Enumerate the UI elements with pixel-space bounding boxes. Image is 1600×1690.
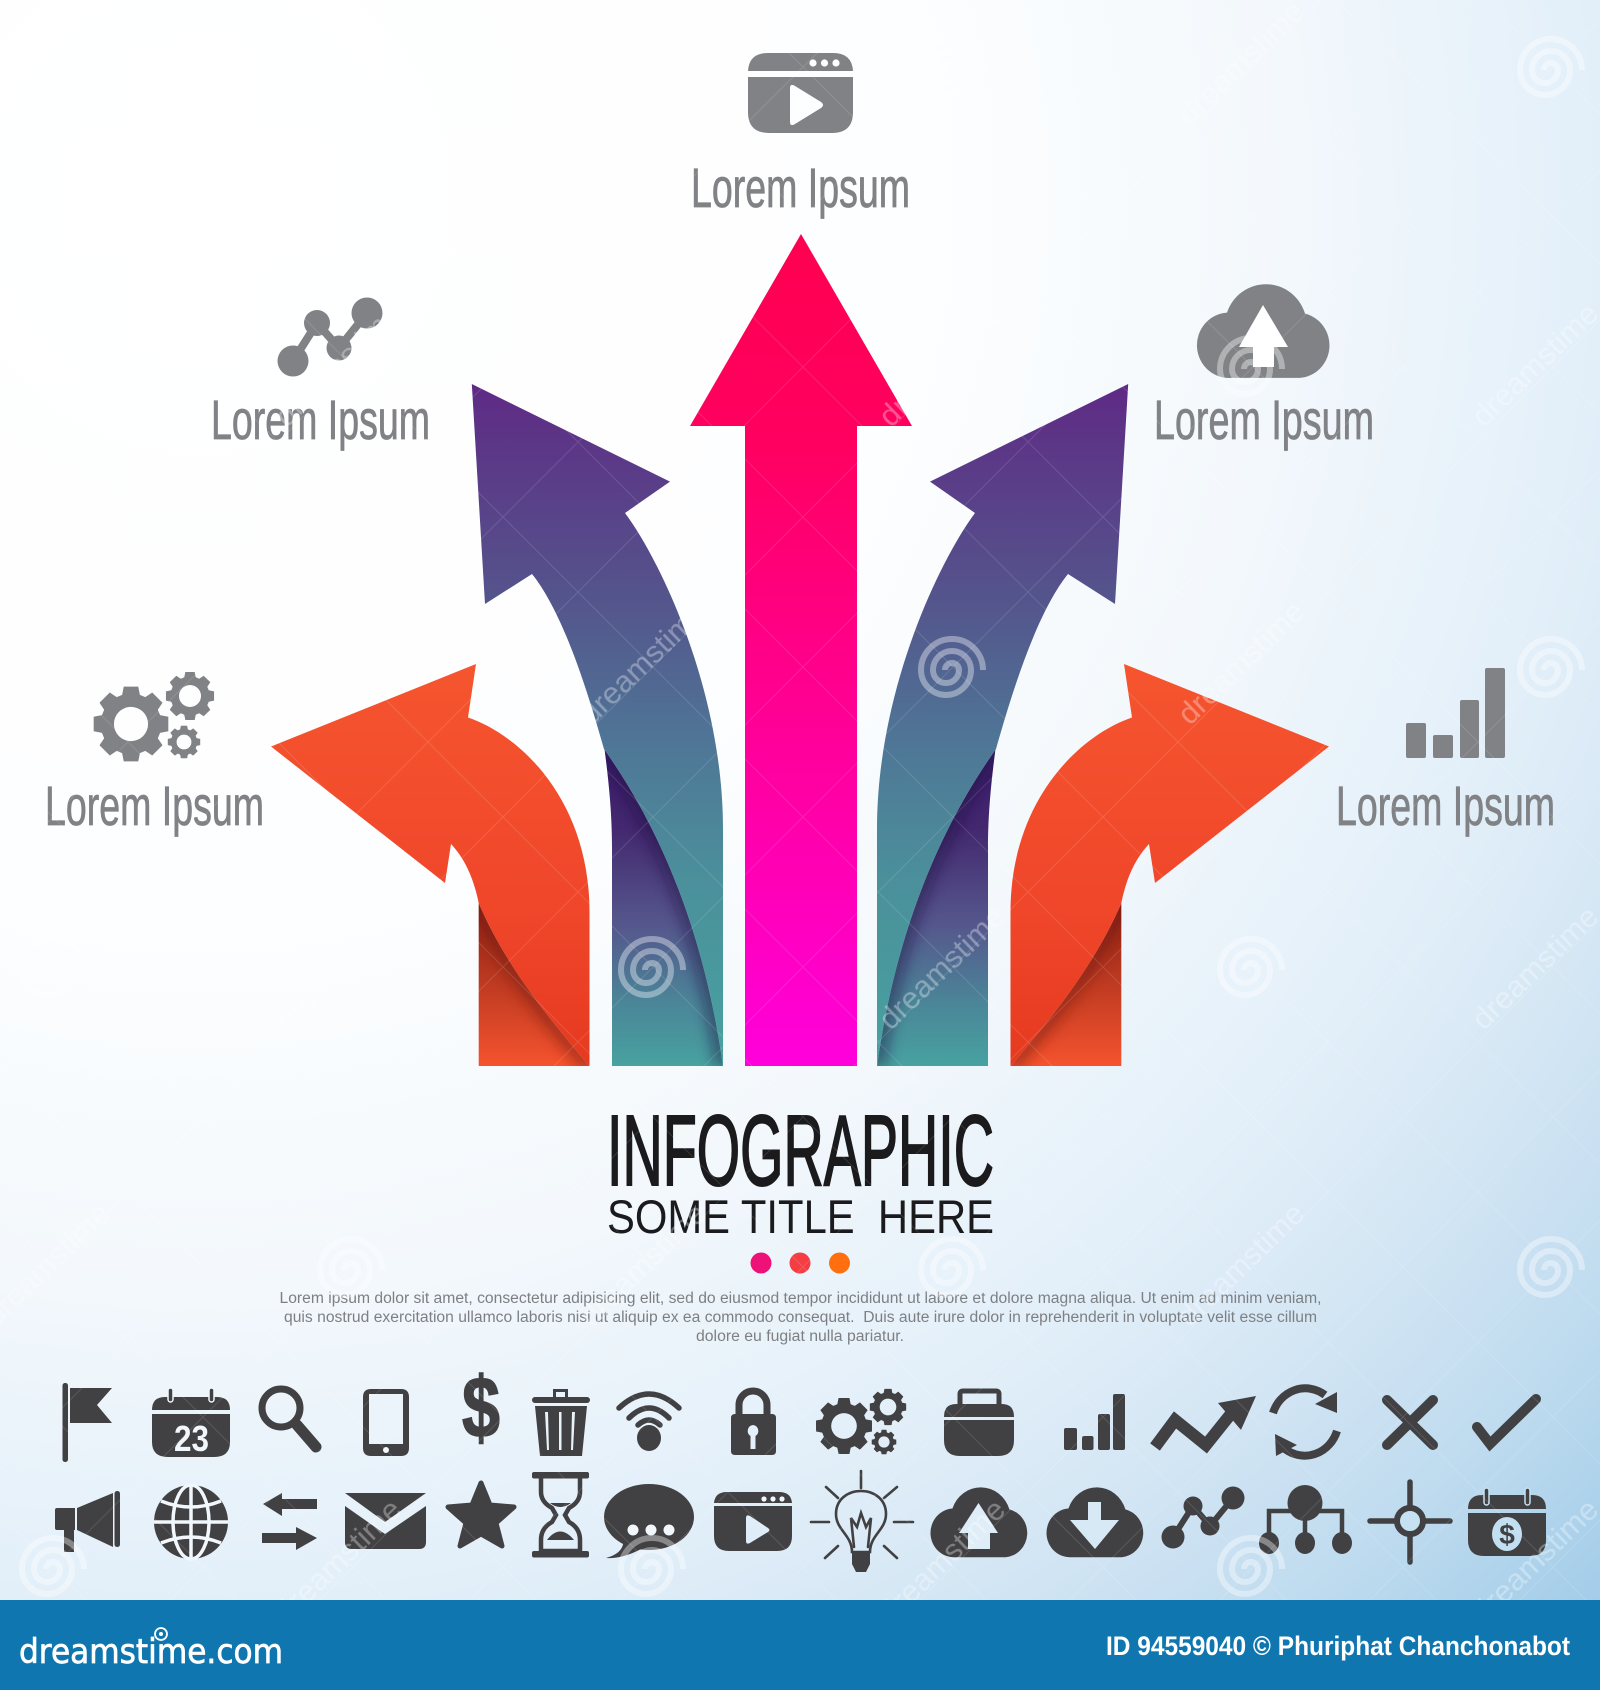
icon: briefcase [944, 1391, 1014, 1456]
paragraph: dolore eu fugiat nulla pariatur. [696, 1328, 904, 1345]
icon row 2 [55, 1471, 1546, 1572]
subtitle: SOME TITLE HERE [607, 1190, 994, 1243]
icon: calendar 23: 23 [174, 1418, 209, 1459]
icon: hourglass [532, 1472, 589, 1558]
icon: hierarchy [1259, 1485, 1352, 1554]
icon: calendar dollar: $ [1499, 1519, 1515, 1550]
icon: speech bubble [604, 1484, 694, 1558]
brand logo: dreamstime.com [19, 1632, 283, 1672]
icon: bars small [1064, 1394, 1125, 1450]
label: top: Lorem Ipsum [691, 156, 910, 219]
icon: globe [154, 1485, 228, 1559]
icon: video player small [714, 1492, 792, 1551]
icon: lock [731, 1391, 776, 1455]
arrow: right purple [877, 384, 1128, 1066]
icon: envelope [345, 1493, 426, 1549]
icon: gears small [816, 1389, 906, 1454]
icon: light bulb [811, 1471, 913, 1572]
icon: cross [1387, 1400, 1433, 1445]
paragraph [280, 1290, 1322, 1345]
icon row 1 [62, 1360, 1536, 1462]
title: INFOGRAPHIC [607, 1095, 994, 1207]
icon: calendar dollar [1468, 1488, 1546, 1556]
icon: magnifier [262, 1389, 316, 1447]
watermark: text: dreamstime [871, 1492, 1012, 1629]
icon: dollar: $ [462, 1360, 500, 1456]
watermark: text: dreamstime [267, 899, 408, 1036]
icon: gears (left) [94, 672, 214, 761]
icon: network trend (upper left) [278, 298, 382, 376]
icon: video player (top) [748, 53, 853, 133]
icon: cloud download small [1046, 1487, 1143, 1557]
icon: cloud upload (upper right) [1197, 284, 1329, 378]
arrow group [271, 234, 1329, 1066]
watermark: text: dreamstime [1170, 1196, 1311, 1333]
arrow: left purple [472, 384, 723, 1066]
watermark: text: dreamstime [871, 899, 1012, 1036]
label: upper left: Lorem Ipsum [211, 388, 430, 451]
paragraph: Lorem ipsum dolor sit amet, consectetur adipisicing elit, sed do eiusmod tempor incididunt ut labore et dolore magna aliqua. Ut enim ad minim veniam, [280, 1290, 1322, 1307]
icon: check [1477, 1399, 1536, 1444]
icon: calendar 23 [152, 1388, 230, 1459]
watermark: text: dreamstime [267, 1492, 408, 1629]
arrow: left orange [271, 664, 590, 1066]
watermark: text: dreamstime [572, 594, 713, 731]
footer banner [0, 1600, 1600, 1690]
icon: phone [363, 1389, 409, 1456]
label: upper right: Lorem Ipsum [1154, 388, 1374, 451]
icon: trash [532, 1389, 590, 1456]
watermark: text: dreamstime [267, 296, 408, 433]
icon: megaphone [55, 1491, 120, 1552]
icon: crosshair [1370, 1482, 1450, 1562]
watermark: text: dreamstime [871, 296, 1012, 433]
icon: bar chart (right) [1406, 668, 1505, 758]
icon: star [448, 1483, 514, 1546]
icon: wifi [619, 1394, 679, 1451]
three dots [750, 1252, 850, 1274]
watermark: text: dreamstime [572, 1196, 713, 1333]
icon: swap arrows [262, 1493, 317, 1550]
icon: refresh [1273, 1388, 1337, 1456]
arrow: right orange [1010, 664, 1329, 1066]
watermark: text: dreamstime [1170, 594, 1311, 731]
arrow: center pink [690, 234, 912, 1066]
icon: cloud upload small [930, 1487, 1027, 1557]
icon: trend arrow [1155, 1396, 1256, 1447]
label: left: Lorem Ipsum [45, 774, 264, 837]
icon: network trend small [1162, 1486, 1244, 1548]
paragraph: quis nostrud exercitation ullamco laboris nisi ut aliquip ex ea commodo consequat. Duis aute irure dolor in reprehenderit in voluptate velit esse cillum [284, 1309, 1317, 1326]
icon: flag [62, 1383, 112, 1462]
